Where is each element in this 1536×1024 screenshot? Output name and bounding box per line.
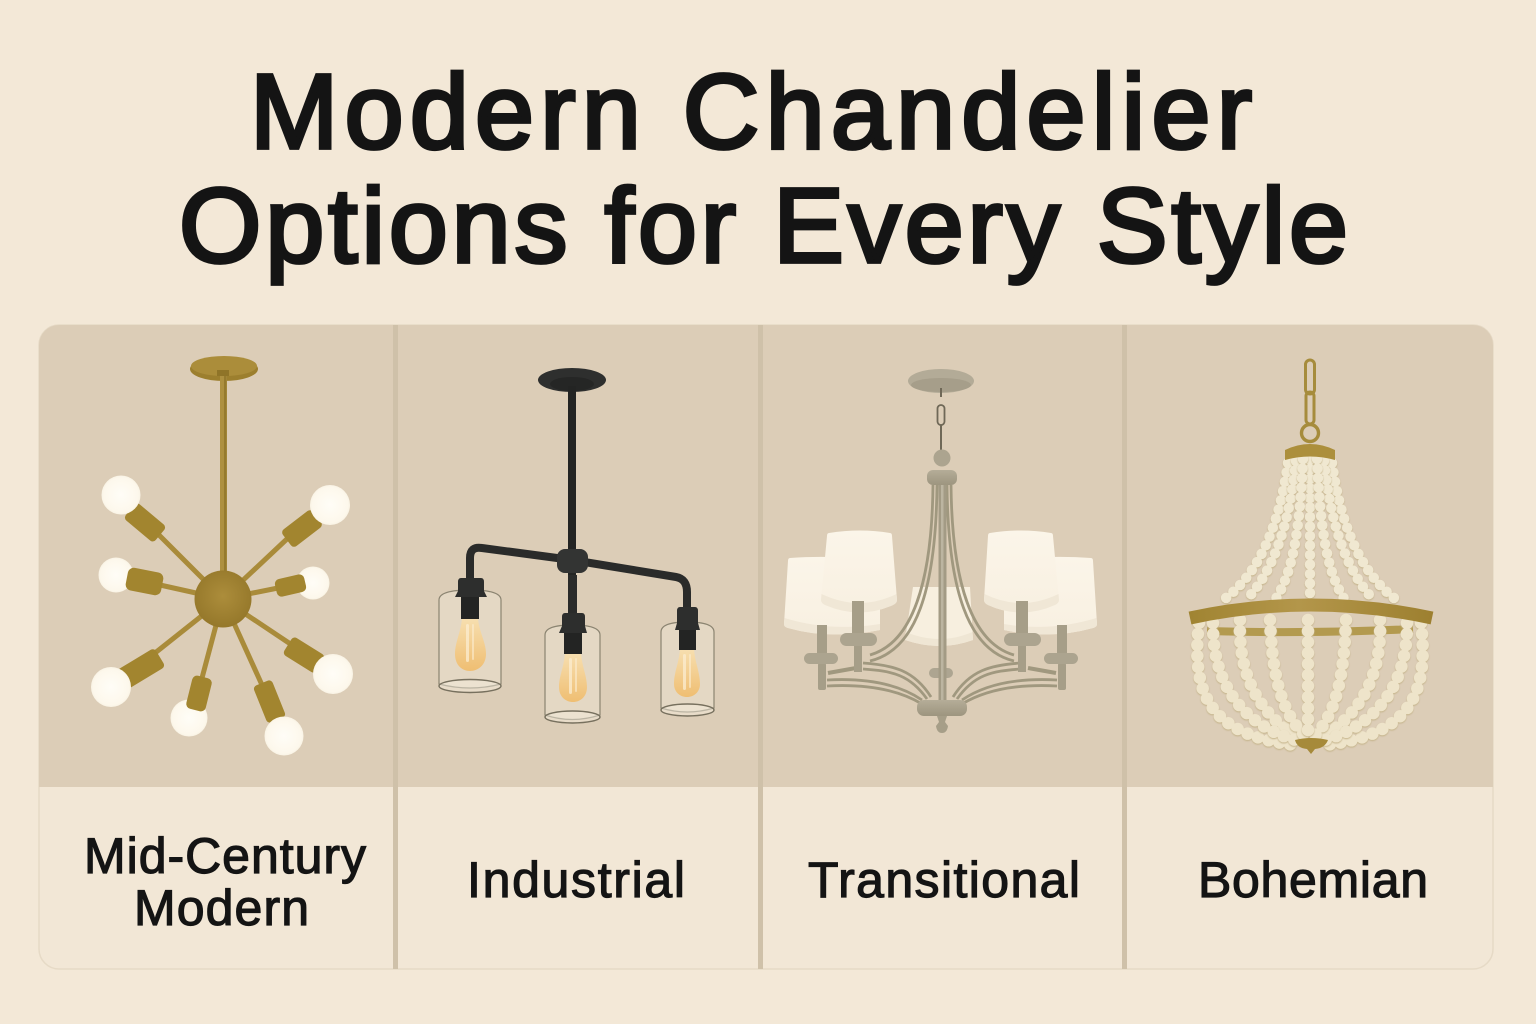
bulb sockets [116, 502, 326, 724]
icon: sputnik chandelier [91, 356, 353, 756]
gold cap [1285, 444, 1335, 460]
glass and bulb: center [545, 613, 600, 723]
panel: bohemian [1190, 360, 1432, 908]
label: mid-century modern: Modern [134, 880, 309, 936]
icon: wood bead chandelier [1190, 360, 1432, 754]
label: industrial: Industrial [467, 852, 685, 908]
title [179, 53, 1348, 285]
candle holders [804, 601, 1078, 690]
label: mid-century modern: Mid-Century [84, 828, 366, 884]
label: mid-century modern [84, 828, 366, 936]
icon: transitional shaded chandelier [784, 369, 1097, 733]
beads: upper swags [1226, 459, 1394, 600]
title: Modern Chandelier [250, 53, 1252, 171]
beads: lower bowl [1197, 620, 1423, 745]
glass and bulb: right [661, 607, 714, 716]
front shades [821, 530, 1059, 612]
title: Options for Every Style [179, 167, 1348, 285]
back bulbs [98, 558, 330, 736]
front bulbs [91, 476, 353, 756]
bottom finial [1295, 738, 1328, 754]
icon: industrial pipe chandelier [439, 368, 714, 723]
panel: transitional [784, 369, 1097, 908]
label: transitional: Transitional [808, 852, 1080, 908]
glass and bulb: left [439, 578, 501, 692]
gold hoop [1190, 605, 1432, 618]
chain [1302, 360, 1318, 442]
panel: style comparison card [39, 325, 1493, 969]
back and center shades [784, 557, 1097, 646]
panel: mid-century modern [84, 356, 366, 936]
arms [827, 485, 1057, 704]
label: bohemian: Bohemian [1198, 852, 1428, 908]
beads: center strand and inner ring [1207, 460, 1413, 632]
panel: industrial [439, 368, 714, 908]
